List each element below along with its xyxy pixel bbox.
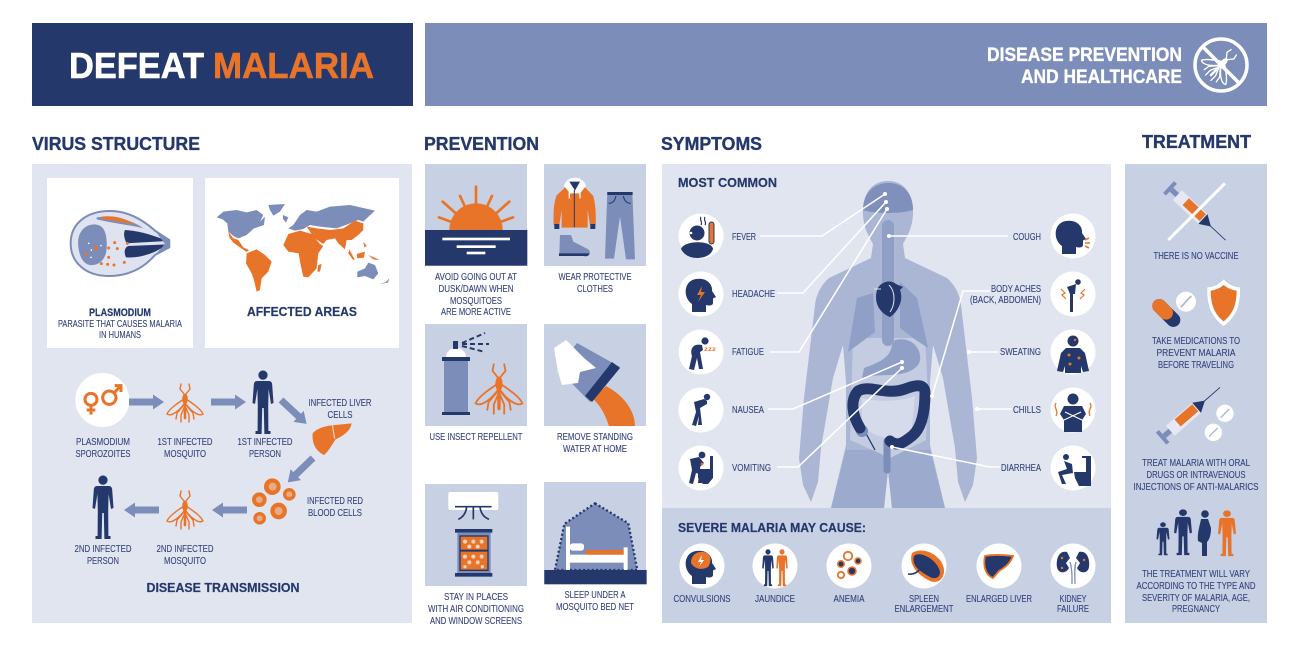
caption: MOSQUITOES xyxy=(450,295,502,307)
world map xyxy=(217,204,389,292)
caption: ACCORDING TO THE TYPE AND xyxy=(1136,580,1256,592)
icon: jaundice xyxy=(752,544,798,588)
torso highlight xyxy=(850,338,928,458)
caption: TAKE MEDICATIONS TO xyxy=(1152,335,1240,347)
symptom: diarrhea: DIARRHEA xyxy=(1001,462,1041,474)
transmission labels: INFECTED RED xyxy=(307,495,363,507)
caption: disease transmission: DISEASE TRANSMISSION xyxy=(146,580,300,595)
tile: protective clothes xyxy=(544,164,646,295)
title banner: MALARIA xyxy=(213,45,374,86)
caption: MOSQUITO BED NET xyxy=(556,601,634,613)
icon: plasmodium cell xyxy=(71,211,169,276)
heading: symptoms: SYMPTOMS xyxy=(661,134,762,154)
symptom: body aches xyxy=(970,272,1096,316)
icon: gloved squeegee xyxy=(554,340,635,426)
transmission labels: BLOOD CELLS xyxy=(308,507,362,519)
panel: symptoms xyxy=(662,164,1111,623)
heart xyxy=(874,282,903,317)
transmission labels: SPOROZOITES xyxy=(76,448,130,460)
symptom: nausea: NAUSEA xyxy=(732,404,764,416)
caption xyxy=(435,271,517,318)
symptom: vomiting: VOMITING xyxy=(732,462,771,474)
icon: spleen xyxy=(902,544,946,588)
caption: AND WINDOW SCREENS xyxy=(430,615,522,627)
severe labels: FAILURE xyxy=(1057,603,1089,615)
caption xyxy=(428,591,524,627)
transmission labels: 1ST INFECTED xyxy=(238,436,293,448)
caption: ARE MORE ACTIVE xyxy=(441,306,511,318)
caption xyxy=(556,589,634,613)
caption: plasmodium: IN HUMANS xyxy=(99,329,141,341)
symptom: vomiting xyxy=(678,446,771,490)
caption xyxy=(557,431,633,455)
symptom: nausea xyxy=(678,388,764,432)
caption: PREGNANCY xyxy=(1172,603,1220,615)
caption: plasmodium: PLASMODIUM xyxy=(89,307,151,319)
transmission labels: 2ND INFECTED xyxy=(74,543,132,555)
rectum and appendix xyxy=(856,425,887,470)
transmission labels: PLASMODIUM xyxy=(76,436,130,448)
caption: CLOTHES xyxy=(577,283,613,295)
symptom: sweating: SWEATING xyxy=(1000,346,1041,358)
severe labels: CONVULSIONS xyxy=(674,593,730,605)
caption: WEAR PROTECTIVE xyxy=(558,271,632,283)
symptom: fatigue: zzz xyxy=(704,347,716,353)
icon: syringe and tablets xyxy=(1156,381,1234,445)
icon: kidney failure xyxy=(1050,544,1096,588)
transmission labels xyxy=(74,397,372,567)
tile: standing water xyxy=(544,324,646,455)
caption: AVOID GOING OUT AT xyxy=(435,271,517,283)
icon: spray can and mosquito xyxy=(442,333,522,415)
trachea and esophagus xyxy=(882,226,894,340)
subtitle banner xyxy=(425,23,1267,106)
icon: air conditioner and screened window xyxy=(448,492,498,577)
icon: sunset xyxy=(425,187,527,266)
transmission labels: 1ST INFECTED xyxy=(158,436,213,448)
caption: DRUGS OR INTRAVENOUS xyxy=(1146,469,1246,481)
legs shading xyxy=(831,450,945,508)
icon: liver xyxy=(313,423,352,455)
severe labels: ENLARGEMENT xyxy=(894,603,954,615)
tile: bed net xyxy=(544,482,647,613)
severe labels xyxy=(674,593,1089,615)
icon: convulsions xyxy=(680,544,724,588)
symptom: chills xyxy=(1013,388,1096,432)
tile: air conditioning xyxy=(425,484,527,627)
title banner xyxy=(32,23,413,106)
caption: plasmodium: PARASITE THAT CAUSES MALARIA xyxy=(58,318,182,330)
transmission labels: INFECTED LIVER xyxy=(308,397,372,409)
transmission labels: 2ND INFECTED xyxy=(156,543,214,555)
stomach xyxy=(862,339,920,378)
caption xyxy=(558,271,632,295)
icon: no mosquito xyxy=(1195,39,1247,91)
panel: severe malaria xyxy=(662,508,1111,623)
subtitle banner: AND HEALTHCARE xyxy=(1021,67,1182,88)
panel: prevention xyxy=(425,164,647,627)
icon: bed under net xyxy=(544,503,647,584)
icon: anemia xyxy=(826,544,872,588)
symptom: chills: CHILLS xyxy=(1013,404,1041,416)
icon: crossed syringe xyxy=(1163,181,1231,246)
icon: enlarged liver xyxy=(976,544,1022,588)
heading: most common: MOST COMMON xyxy=(678,175,777,190)
caption: TREAT MALARIA WITH ORAL xyxy=(1142,457,1250,469)
transmission labels: PERSON xyxy=(249,448,281,460)
icon: jacket, trousers and boot xyxy=(554,178,635,259)
severe labels: KIDNEY xyxy=(1060,593,1086,605)
icon: first person xyxy=(252,370,274,434)
caption: STAY IN PLACES xyxy=(444,591,508,603)
transmission labels: MOSQUITO xyxy=(164,448,206,460)
caption: THERE IS NO VACCINE xyxy=(1154,250,1238,262)
body silhouette xyxy=(799,181,977,508)
caption: DUSK/DAWN WHEN xyxy=(438,283,514,295)
card: affected areas xyxy=(205,178,399,348)
large intestine xyxy=(853,386,925,444)
caption: affected areas: AFFECTED AREAS xyxy=(247,304,357,319)
severe labels: ENLARGED LIVER xyxy=(966,593,1032,605)
icon: second person xyxy=(92,476,114,539)
caption: REMOVE STANDING xyxy=(557,431,633,443)
symptom: fever xyxy=(678,214,756,258)
transmission labels: MOSQUITO xyxy=(164,555,206,567)
caption: PREVENT MALARIA xyxy=(1156,347,1236,359)
lungs xyxy=(848,282,928,352)
transmission labels: PERSON xyxy=(87,555,119,567)
icon: family xyxy=(1156,509,1236,556)
icon: second mosquito xyxy=(167,491,203,529)
severe labels: ANEMIA xyxy=(834,593,864,605)
symptom: fever: FEVER xyxy=(732,231,756,243)
symptom: cough: COUGH xyxy=(1013,231,1041,243)
caption: SLEEP UNDER A xyxy=(564,589,626,601)
severe labels: SPLEEN xyxy=(909,593,939,605)
symptom: body aches: BODY ACHES xyxy=(991,283,1041,295)
panel: virus structure xyxy=(32,164,412,623)
caption: plasmodium xyxy=(58,307,182,341)
arrows xyxy=(124,394,318,518)
heading: prevention: PREVENTION xyxy=(424,134,539,154)
card: plasmodium xyxy=(47,178,193,348)
panel: treatment xyxy=(1125,164,1267,623)
symptom: cough xyxy=(1013,214,1096,258)
title banner: DEFEAT xyxy=(69,45,204,86)
icon: red blood cells xyxy=(252,478,296,525)
tile: avoid dusk and dawn xyxy=(425,164,527,318)
caption xyxy=(1152,335,1240,371)
symptom: fatigue xyxy=(678,330,764,374)
caption: THE TREATMENT WILL VARY xyxy=(1142,568,1250,580)
connector lines xyxy=(760,192,1012,467)
severe labels: JAUNDICE xyxy=(755,593,795,605)
caption: WITH AIR CONDITIONING xyxy=(428,603,524,615)
caption: BEFORE TRAVELING xyxy=(1158,359,1234,371)
caption: SEVERITY OF MALARIA, AGE, xyxy=(1142,592,1250,604)
small intestine xyxy=(862,396,915,438)
diagram: disease transmission xyxy=(74,370,372,595)
heading: treatment: TREATMENT xyxy=(1142,132,1251,152)
symptom: sweating xyxy=(1000,330,1096,374)
caption: USE INSECT REPELLENT xyxy=(430,431,523,443)
symptom: body aches: (BACK, ABDOMEN) xyxy=(970,294,1041,306)
transmission labels: CELLS xyxy=(328,409,352,421)
heading: virus structure: VIRUS STRUCTURE xyxy=(32,134,200,154)
caption: INJECTIONS OF ANTI-MALARICS xyxy=(1134,481,1258,493)
subtitle banner: DISEASE PREVENTION xyxy=(987,45,1182,66)
symptom: headache: HEADACHE xyxy=(732,288,775,300)
caption xyxy=(1134,457,1258,493)
symptom: fatigue: FATIGUE xyxy=(732,346,764,358)
caption xyxy=(1136,568,1256,615)
tile: insect repellent xyxy=(425,324,527,443)
caption: WATER AT HOME xyxy=(563,443,627,455)
icon: gender symbols xyxy=(75,373,129,427)
body anatomy figure xyxy=(799,181,977,508)
icon: pills and shield xyxy=(1159,279,1240,326)
icon: first mosquito xyxy=(167,384,203,422)
heading: severe malaria: SEVERE MALARIA MAY CAUSE: xyxy=(678,520,866,535)
brain xyxy=(863,183,913,213)
symptom: diarrhea xyxy=(1001,446,1096,490)
symptom: headache xyxy=(678,272,775,316)
